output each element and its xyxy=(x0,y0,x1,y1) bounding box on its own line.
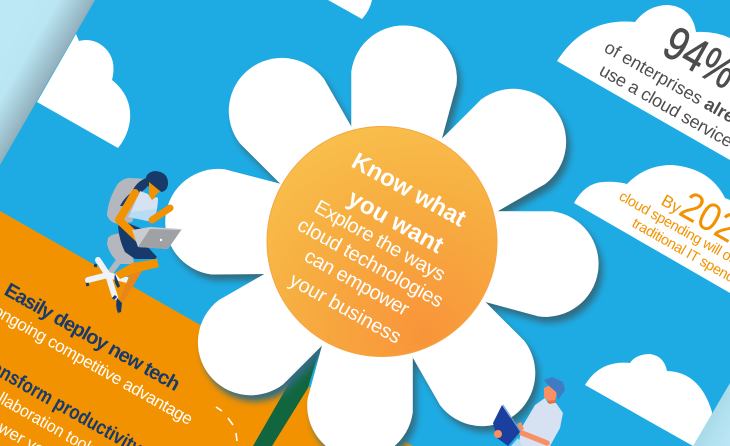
arm right xyxy=(152,208,170,220)
laptop xyxy=(132,227,182,249)
arm left xyxy=(119,193,138,238)
flower stem xyxy=(253,347,320,446)
hair xyxy=(120,171,168,206)
flower centre: you want xyxy=(343,185,448,259)
top xyxy=(130,191,158,222)
seat xyxy=(107,233,134,264)
tablet xyxy=(493,405,520,446)
face xyxy=(544,385,557,401)
flower centre: can empower xyxy=(301,245,413,321)
centre heading: Know what xyxy=(347,148,470,232)
top lower band xyxy=(128,209,157,222)
skirt xyxy=(118,222,157,259)
shoes xyxy=(114,274,122,313)
flower centre xyxy=(267,126,497,356)
tablet edge xyxy=(503,405,521,432)
tablet stand xyxy=(511,438,522,446)
cloud: lower right xyxy=(585,354,712,446)
hair xyxy=(544,377,565,400)
chair base xyxy=(88,260,127,297)
cloud: 2022 xyxy=(574,165,730,295)
heading: easily deploy new tech: Easily deploy new tech xyxy=(1,279,184,396)
cloud: top left xyxy=(37,34,130,148)
neck xyxy=(547,398,556,404)
arm xyxy=(522,433,547,443)
hand xyxy=(494,430,502,438)
upper hand xyxy=(517,422,524,431)
lower leg xyxy=(119,271,142,302)
stat: By 2022: By xyxy=(658,191,685,217)
orange panel text xyxy=(0,279,237,446)
chair stem xyxy=(110,262,118,273)
centre body: Explore the ways xyxy=(311,196,449,286)
woman on chair illustration xyxy=(87,171,182,313)
dashed ring xyxy=(216,407,237,441)
cloud: top fragment xyxy=(328,0,372,19)
orange band xyxy=(0,211,413,446)
flower petals xyxy=(159,19,605,446)
upper leg xyxy=(115,259,159,279)
page edge: bottom right xyxy=(693,383,730,446)
cloud: 94 percent xyxy=(557,5,730,160)
face and neck xyxy=(149,182,160,202)
flower centre: your business xyxy=(286,269,405,348)
chair wheels xyxy=(87,264,116,299)
chair back xyxy=(107,178,148,224)
page edge: top left xyxy=(0,0,95,165)
flower centre: cloud technologies xyxy=(294,214,447,312)
man with tablet illustration xyxy=(493,377,565,446)
body xyxy=(518,398,563,446)
